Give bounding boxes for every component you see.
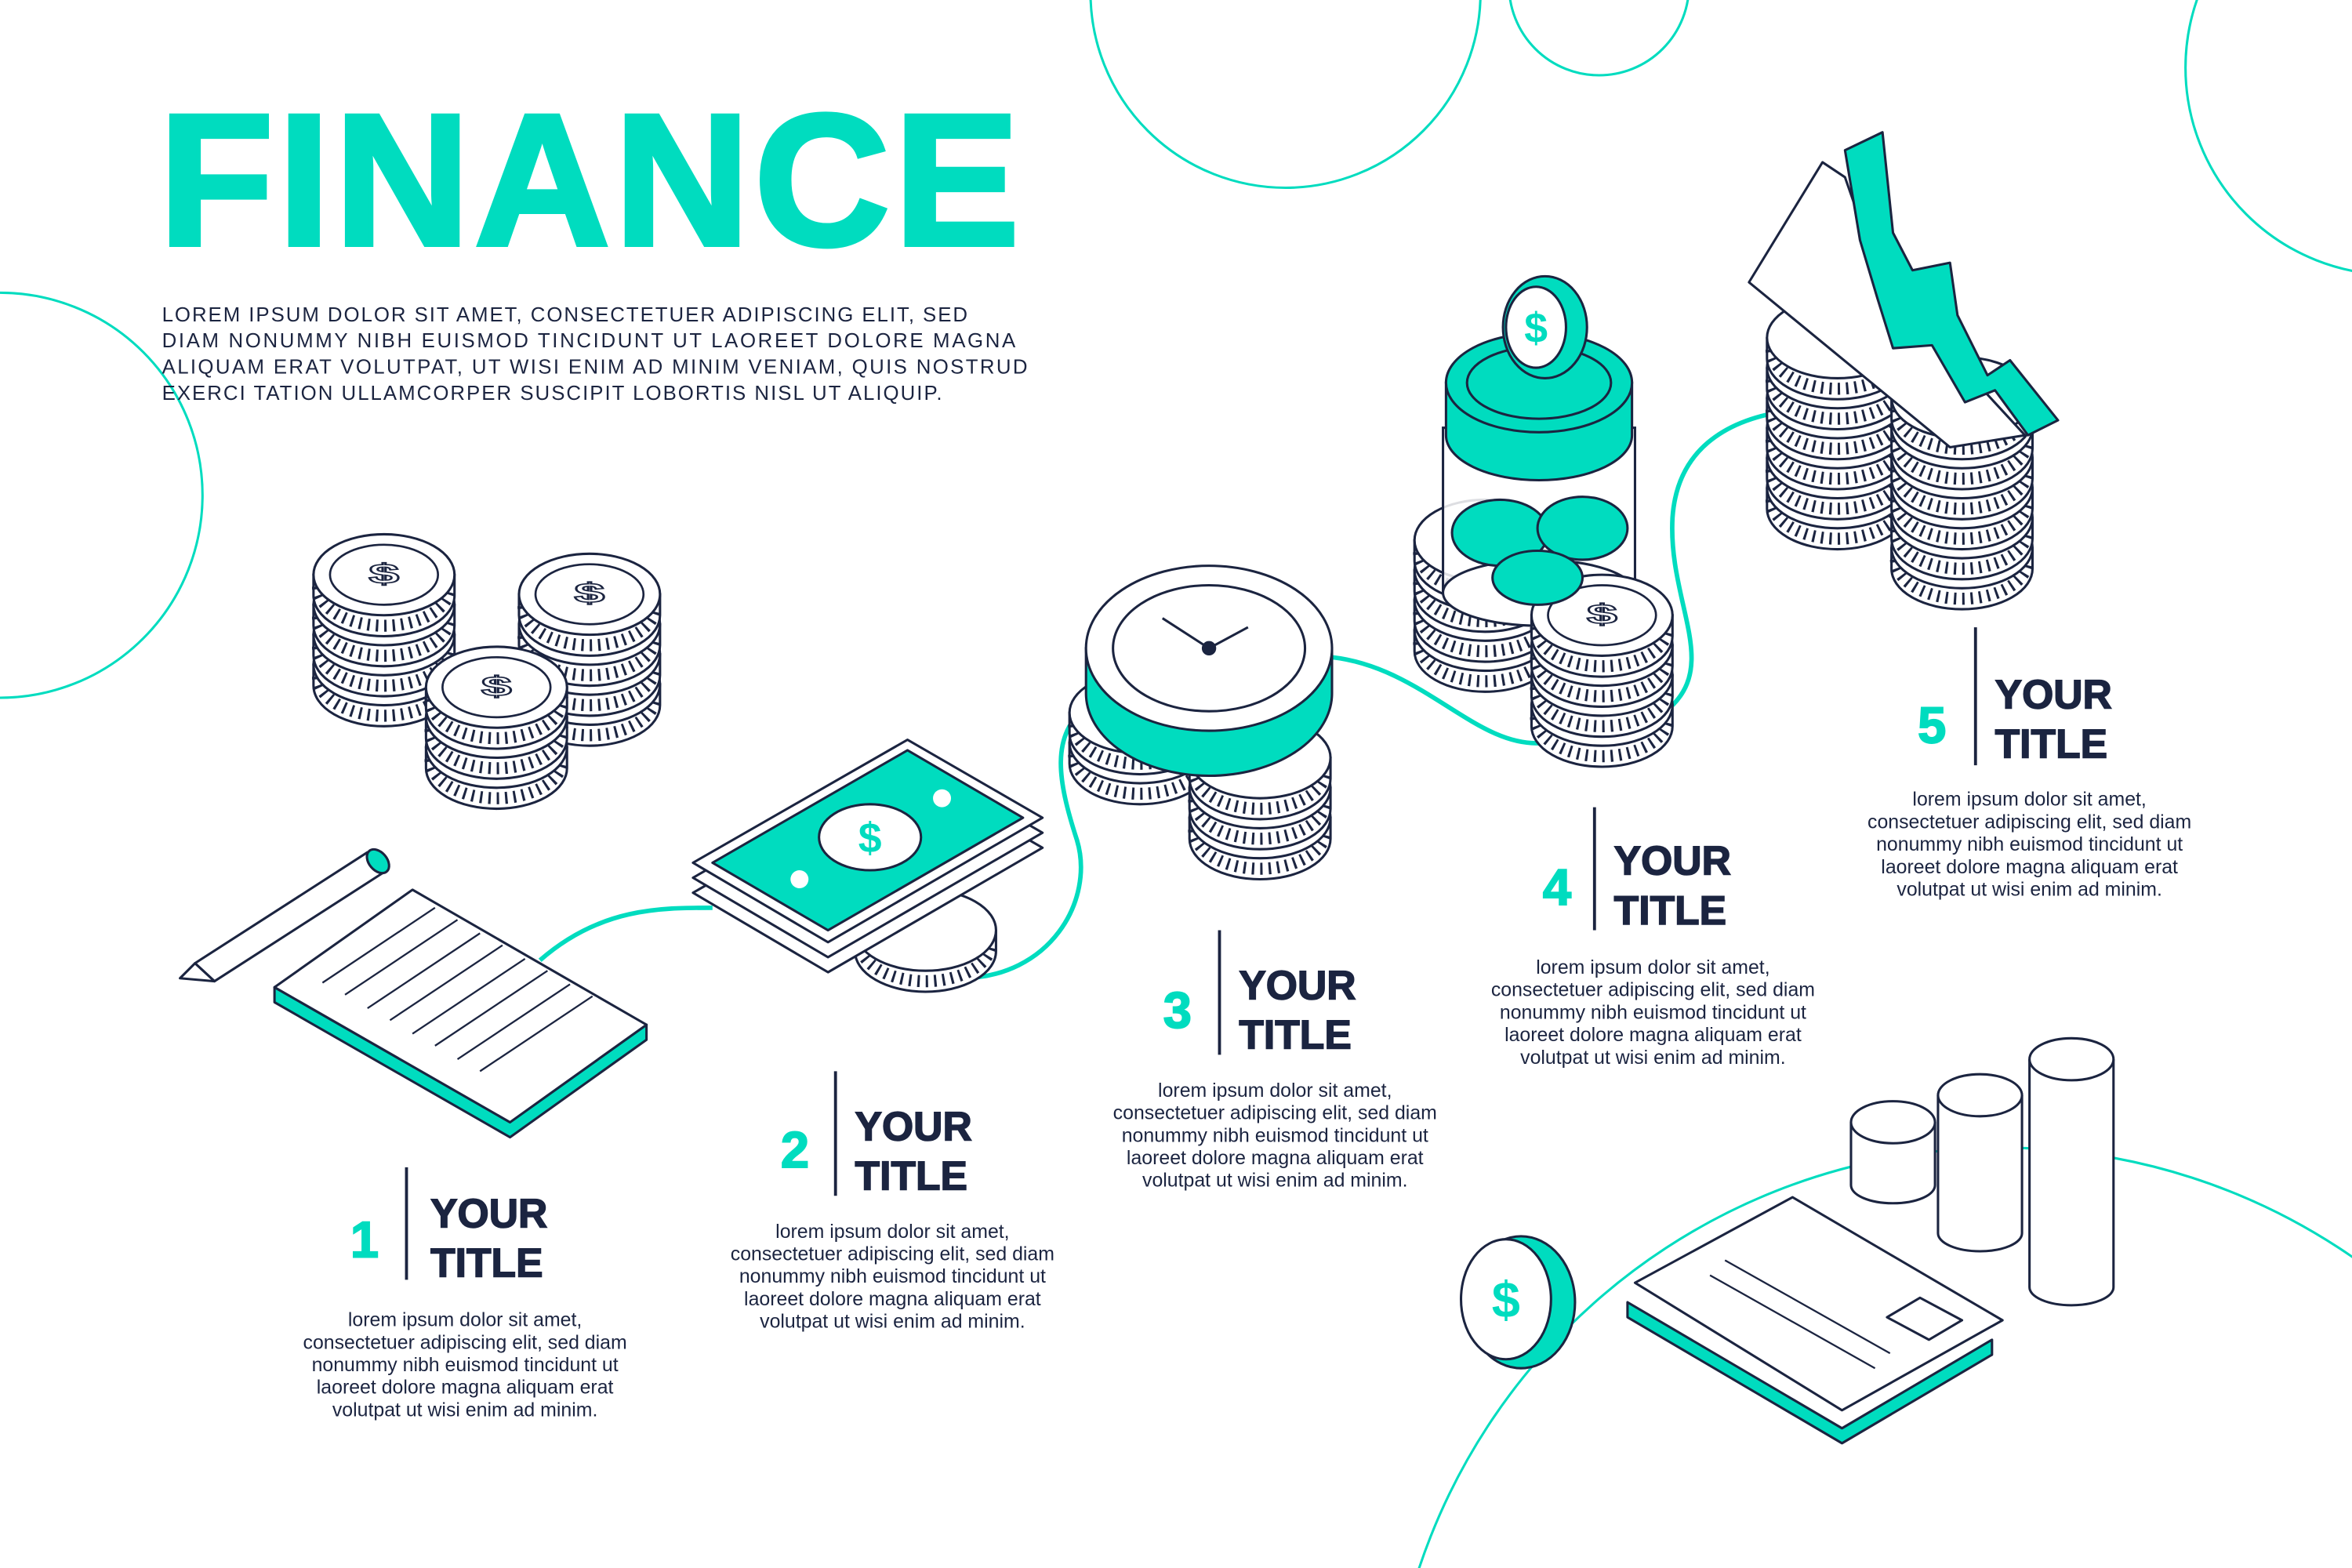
step 2: lorem ipsum dolor sit amet, bbox=[775, 1221, 1010, 1243]
step 2: laoreet dolore magna aliquam erat bbox=[744, 1288, 1041, 1310]
step 2: TITLE bbox=[855, 1153, 967, 1199]
step 3: nonummy nibh euismod tincidunt ut bbox=[1122, 1124, 1428, 1146]
step 1: lorem ipsum dolor sit amet, bbox=[348, 1309, 582, 1331]
step 3: laoreet dolore magna aliquam erat bbox=[1127, 1147, 1424, 1169]
step 3 bbox=[1113, 931, 1437, 1192]
step 3: YOUR bbox=[1239, 963, 1356, 1008]
icon: clock on coins bbox=[1069, 566, 1332, 879]
step 5: TITLE bbox=[1995, 721, 2107, 767]
step 3: volutpat ut wisi enim ad minim. bbox=[1142, 1170, 1408, 1192]
step 5: volutpat ut wisi enim ad minim. bbox=[1896, 879, 2162, 901]
step 1: 1 bbox=[350, 1211, 379, 1269]
icon: banknotes bbox=[693, 740, 1043, 992]
icon: credit card, coin and bar cylinders: $ bbox=[1492, 1271, 1520, 1328]
step 2: volutpat ut wisi enim ad minim. bbox=[760, 1311, 1025, 1333]
step 5: lorem ipsum dolor sit amet, bbox=[1912, 789, 2147, 811]
icon: coin stacks bbox=[314, 534, 660, 809]
step 4: YOUR bbox=[1614, 838, 1731, 884]
intro paragraph bbox=[162, 304, 1028, 405]
step 1 bbox=[303, 1167, 627, 1421]
step 1: volutpat ut wisi enim ad minim. bbox=[332, 1399, 597, 1421]
step 3: 3 bbox=[1163, 982, 1192, 1039]
step 5: laoreet dolore magna aliquam erat bbox=[1881, 856, 2178, 878]
icon: money jar: $ bbox=[1524, 306, 1548, 352]
step 1: laoreet dolore magna aliquam erat bbox=[317, 1377, 614, 1399]
step 3: lorem ipsum dolor sit amet, bbox=[1158, 1080, 1392, 1102]
step 1: consectetuer adipiscing elit, sed diam bbox=[303, 1331, 627, 1353]
step 5: 5 bbox=[1918, 696, 1946, 753]
step 4: TITLE bbox=[1614, 887, 1726, 933]
step 4: volutpat ut wisi enim ad minim. bbox=[1520, 1047, 1786, 1069]
step 5: YOUR bbox=[1995, 671, 2112, 717]
step 1: nonummy nibh euismod tincidunt ut bbox=[312, 1354, 619, 1376]
step 2: consectetuer adipiscing elit, sed diam bbox=[731, 1243, 1054, 1265]
icon: notepad and pencil bbox=[180, 845, 647, 1138]
step 2: YOUR bbox=[855, 1103, 972, 1149]
step 1: TITLE bbox=[430, 1240, 543, 1286]
connecting path bbox=[540, 412, 1785, 978]
step 4: lorem ipsum dolor sit amet, bbox=[1536, 956, 1770, 978]
step 4: 4 bbox=[1543, 858, 1571, 916]
step 5: nonummy nibh euismod tincidunt ut bbox=[1876, 833, 2183, 855]
step 4: consectetuer adipiscing elit, sed diam bbox=[1491, 979, 1815, 1001]
icon: falling chart on coin stacks bbox=[1749, 132, 2058, 609]
step 5: consectetuer adipiscing elit, sed diam bbox=[1867, 811, 2191, 833]
step 2 bbox=[731, 1071, 1054, 1333]
icon: credit card, coin and bar cylinders bbox=[1461, 1038, 2114, 1443]
step 3: consectetuer adipiscing elit, sed diam bbox=[1113, 1102, 1437, 1124]
intro paragraph: ALIQUAM ERAT VOLUTPAT, UT WISI ENIM AD MINIM VENIAM, QUIS NOSTRUD bbox=[162, 357, 1028, 379]
icon: money jar bbox=[1414, 276, 1672, 767]
step 1: YOUR bbox=[430, 1190, 547, 1236]
intro paragraph: EXERCI TATION ULLAMCORPER SUSCIPIT LOBORTIS NISL UT ALIQUIP. bbox=[162, 383, 942, 405]
step 3: TITLE bbox=[1239, 1012, 1352, 1058]
step 4: laoreet dolore magna aliquam erat bbox=[1504, 1024, 1802, 1046]
step 4 bbox=[1491, 808, 1815, 1069]
icon: banknotes: $ bbox=[858, 815, 882, 862]
step 4: nonummy nibh euismod tincidunt ut bbox=[1500, 1001, 1806, 1023]
intro paragraph: DIAM NONUMMY NIBH EUISMOD TINCIDUNT UT LAOREET DOLORE MAGNA bbox=[162, 330, 1016, 352]
intro paragraph: LOREM IPSUM DOLOR SIT AMET, CONSECTETUER ADIPISCING ELIT, SED bbox=[162, 304, 967, 326]
step 2: nonummy nibh euismod tincidunt ut bbox=[739, 1265, 1046, 1287]
step 2: 2 bbox=[781, 1121, 809, 1178]
title: FINANCE bbox=[159, 75, 1024, 285]
step 5 bbox=[1867, 627, 2191, 901]
